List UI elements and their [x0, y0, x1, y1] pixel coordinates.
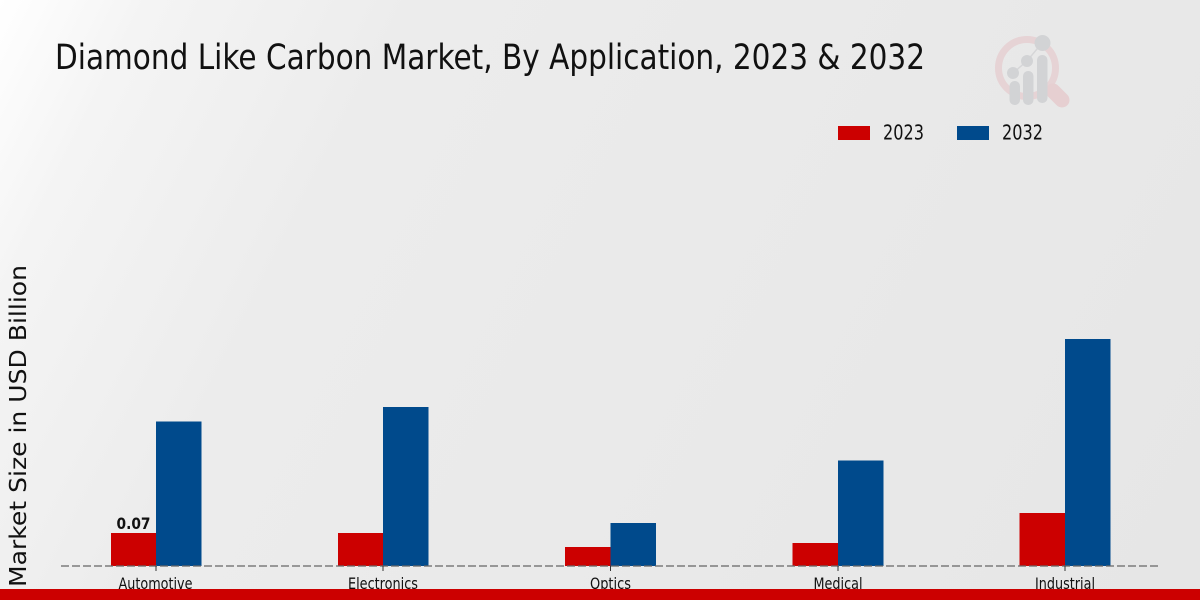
x axis labels: Industrial — [1035, 574, 1095, 593]
group: Industrial — [1020, 339, 1110, 566]
x axis labels: Automotive — [118, 574, 192, 593]
x axis labels: Electronics — [348, 574, 418, 593]
bar chart — [111, 339, 1110, 566]
group: Automotive: 0.07 — [116, 514, 150, 533]
group: Optics — [565, 523, 656, 566]
legend item: 2032 — [957, 120, 1043, 144]
legend item: 2023: 2023 — [883, 120, 924, 144]
legend — [838, 120, 1043, 144]
y axis label: Market Size in USD Billion — [4, 265, 32, 587]
watermark logo icon — [998, 35, 1062, 105]
x axis baseline — [61, 566, 1159, 571]
x axis labels: Medical — [814, 574, 862, 593]
bottom red band — [0, 589, 1200, 600]
legend item: 2032: 2032 — [1002, 120, 1043, 144]
x axis labels: Optics — [590, 574, 631, 593]
legend item: 2023 — [838, 120, 924, 144]
group: Automotive — [111, 422, 202, 566]
title: Diamond Like Carbon Market, By Application, 2023 & 2032 — [55, 38, 925, 78]
group: Medical — [792, 460, 884, 566]
x axis labels — [118, 574, 1095, 593]
group: Electronics — [338, 407, 428, 566]
